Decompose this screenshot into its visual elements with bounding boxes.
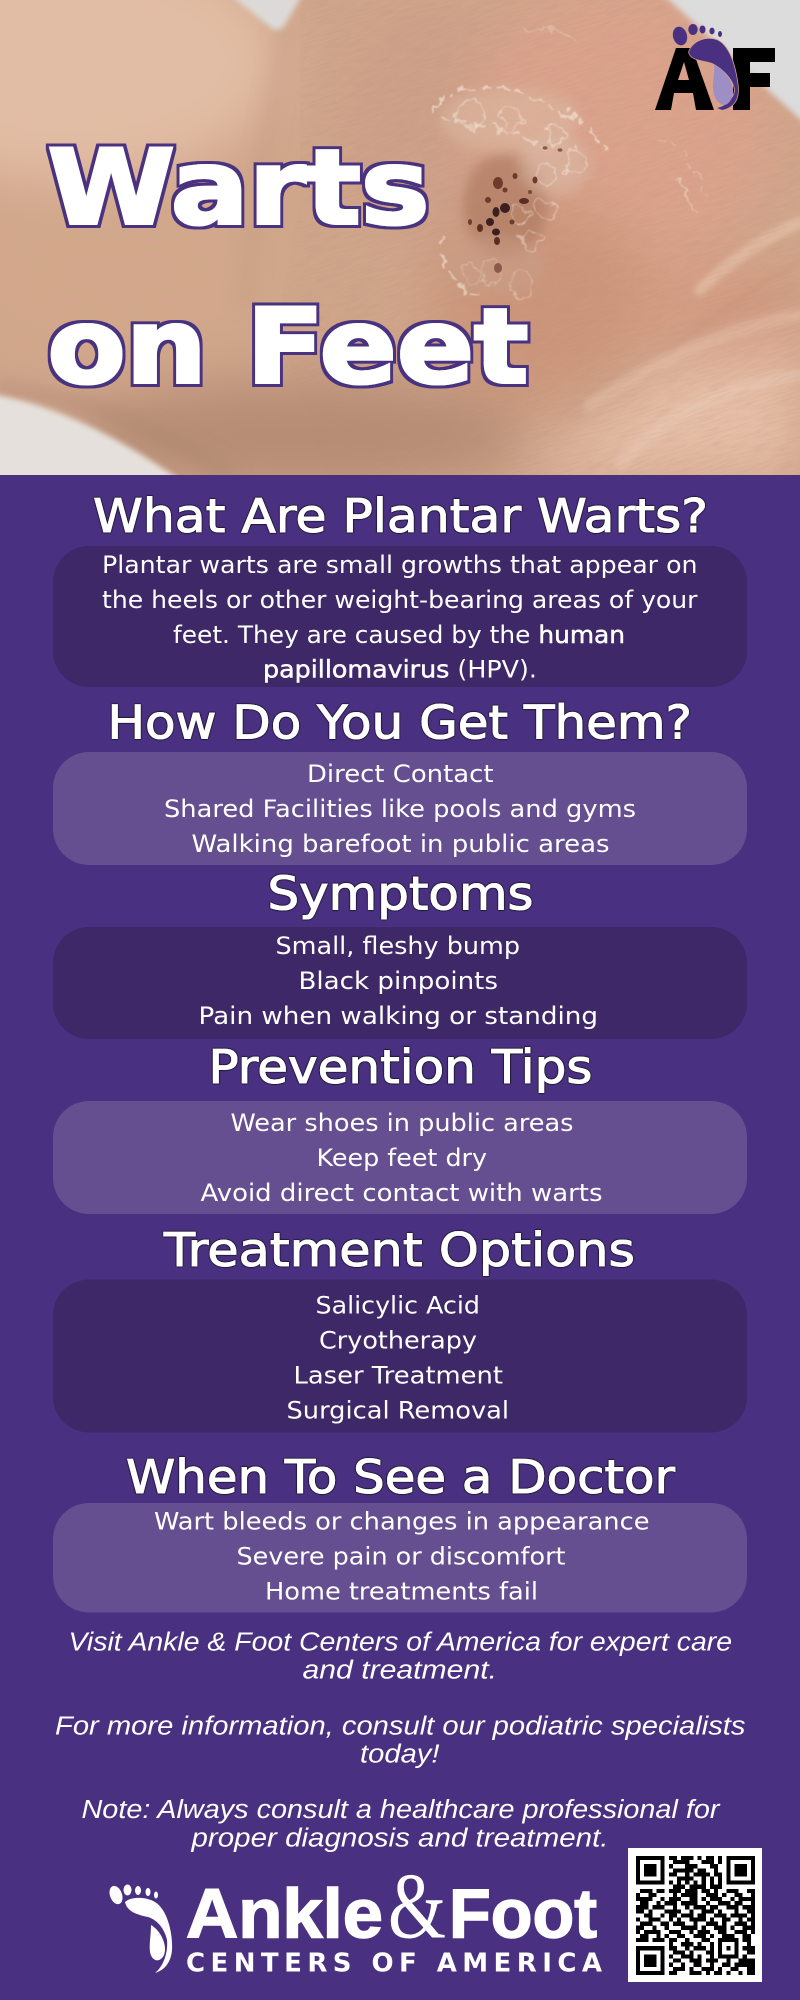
list: Avoid direct contact with warts [200,1179,602,1207]
body text: the heels or other weight-bearing areas of your [102,586,698,614]
list: Cryotherapy [319,1326,477,1354]
note: more information: For more information, consult our podiatric specialists [55,1712,746,1740]
wordmark: Ankle [186,1874,383,1952]
logo foot drop [713,65,733,105]
list: Black pinpoints [298,967,498,995]
list: Home treatments fail [265,1578,538,1606]
tagline: CENTERS OF AMERICA [186,1948,602,1978]
logo letter F [733,48,775,110]
list: Laser Treatment [294,1362,503,1390]
body text [102,551,698,684]
panel background [53,1503,747,1612]
footer logo: Ankle & Foot Centers of America: & [388,1854,446,1958]
title: Warts on Feet [48,128,528,408]
list: Walking barefoot in public areas [192,830,610,858]
panel background [53,1101,747,1214]
panel background [53,927,747,1039]
list: Severe pain or discomfort [236,1542,566,1570]
note: visit: Visit Ankle & Foot Centers of America for expert care [68,1628,732,1656]
panel background [53,1280,747,1432]
heading: How Do You Get Them? [108,696,692,750]
icon: white foot [107,1884,172,1973]
QR code [628,1848,762,1982]
list [286,1292,509,1424]
wart dark spots [468,146,562,273]
list: Salicylic Acid [316,1292,480,1320]
panel: prevention tips [53,1040,747,1214]
panel: symptoms [53,866,747,1039]
list [198,932,598,1030]
panel background [53,752,747,865]
body text: feet. They are caused by the human [173,621,625,649]
body text: Plantar warts are small growths that appear on [102,551,698,579]
logo toes [671,24,722,47]
panel: how do you get them [53,696,747,865]
panel: treatment options [53,1223,747,1432]
panel: when to see a doctor [53,1450,747,1612]
heading: Treatment Options [163,1223,635,1277]
panel: what are plantar warts [53,489,747,687]
logo foot sole [689,39,738,110]
body text: papillomavirus (HPV). [263,656,537,684]
heading: Symptoms [268,866,534,920]
list: Wear shoes in public areas [230,1109,574,1137]
heading: Prevention Tips [208,1040,592,1094]
list [154,1508,650,1606]
list [200,1109,602,1207]
note: visit: and treatment. [302,1656,497,1684]
heading: What Are Plantar Warts? [93,489,708,543]
footer logo: Ankle & Foot Centers of America [107,1854,602,1978]
note: more information: today! [360,1740,440,1768]
closing notes [55,1628,746,1852]
list: Keep feet dry [316,1144,487,1172]
skin folds [0,380,108,415]
note: disclaimer: Note: Always consult a healthcare professional for [82,1796,721,1824]
footer logo: Ankle & Foot Centers of America: Foot [449,1874,597,1952]
list: Wart bleeds or changes in appearance [154,1508,650,1536]
list: Small, fleshy bump [276,932,520,960]
list [164,760,636,858]
heading: When To See a Doctor [126,1450,675,1504]
title: Warts on Feet: Warts [48,128,430,248]
note: disclaimer: proper diagnosis and treatment. [190,1824,609,1852]
logo letter A [655,48,714,110]
list: Surgical Removal [286,1396,509,1424]
hero photo: foot sole with plantar wart [0,0,800,475]
background corners [0,0,800,480]
title: Warts on Feet: on Feet [48,288,528,408]
note: visit [68,1628,732,1684]
note: disclaimer [82,1796,721,1852]
skin ridges [621,378,784,466]
list: Shared Facilities like pools and gyms [164,795,636,823]
wart crust [432,28,706,298]
list: Direct Contact [307,760,494,788]
list: Pain when walking or standing [198,1002,598,1030]
wart halo [440,88,590,295]
logo: AF with foot mark [655,24,775,110]
panel background [53,546,747,687]
note: more information [55,1712,746,1768]
